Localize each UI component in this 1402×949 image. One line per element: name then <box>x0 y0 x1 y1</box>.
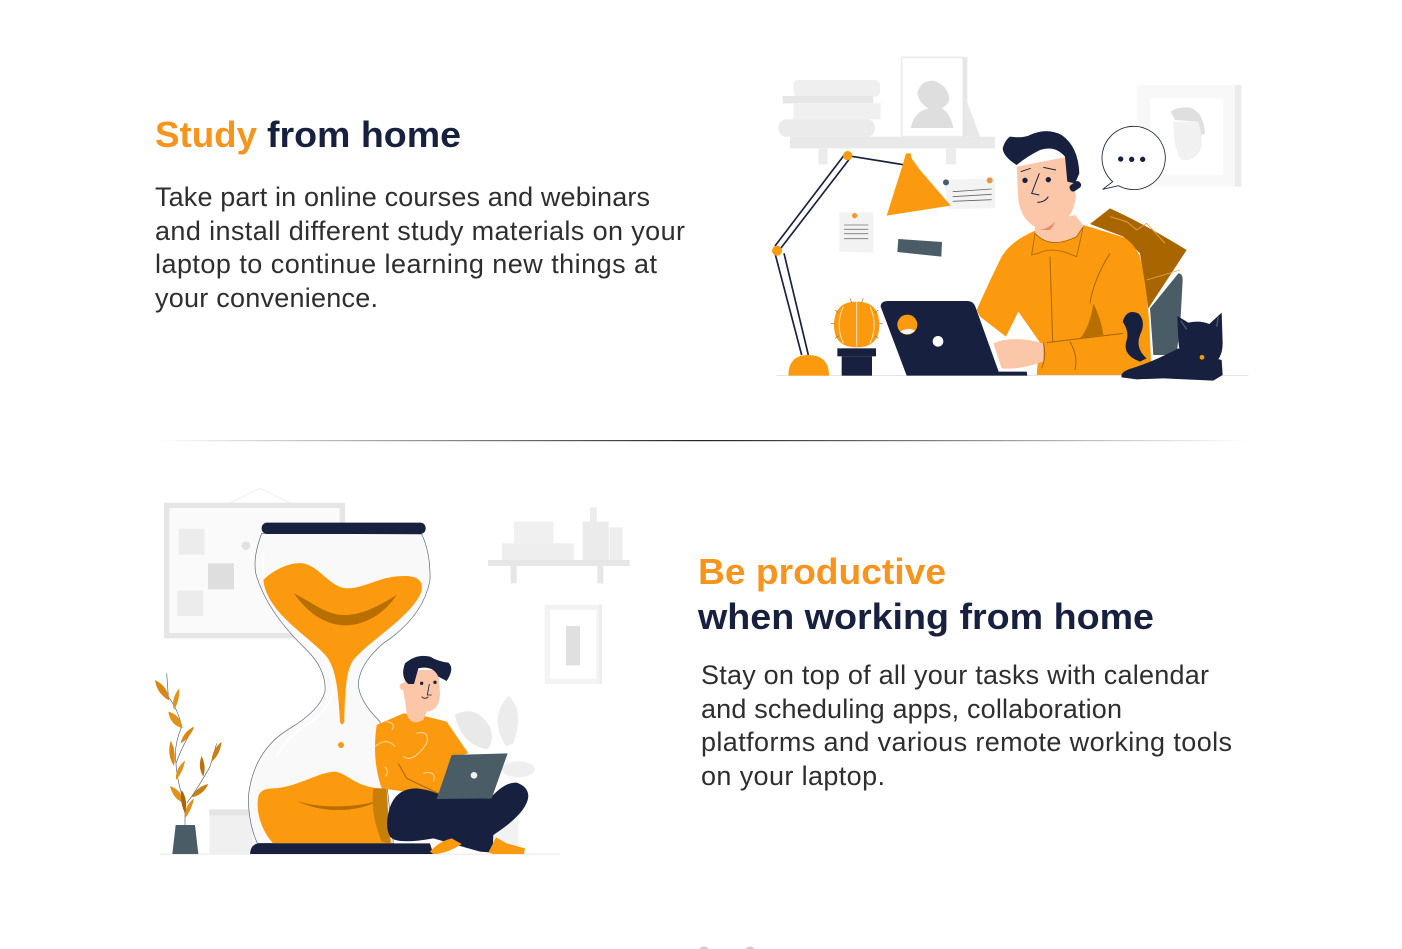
heading: Be productive when working from home: when working from home <box>697 596 1154 637</box>
text block: study description: your convenience. <box>155 283 378 313</box>
laptop <box>881 301 1027 376</box>
text block: productivity description <box>701 660 1232 791</box>
text block: study description: and install different study materials on your <box>155 216 685 246</box>
cactus in pot <box>831 298 883 376</box>
heading: Study from home <box>155 114 461 155</box>
wall picture <box>547 605 602 684</box>
hourglass <box>248 523 433 854</box>
text block: productivity description: platforms and various remote working tools <box>701 727 1232 757</box>
man in orange shirt <box>977 131 1152 375</box>
notice board <box>167 488 342 636</box>
text block: productivity description: on your laptop. <box>701 761 885 791</box>
background leaves <box>455 696 535 777</box>
text block: study description: Take part in online courses and webinars <box>155 182 650 212</box>
grey laptop <box>437 753 508 799</box>
shelf with books and portrait <box>778 57 995 164</box>
heading: Be productive when working from home <box>697 551 1154 637</box>
next section top marks <box>699 946 755 949</box>
sitting man <box>375 656 528 854</box>
text block: productivity description: and scheduling apps, collaboration <box>701 694 1122 724</box>
divider <box>155 440 1250 441</box>
desk lamp <box>772 151 951 376</box>
shelf with boxes <box>488 507 630 583</box>
floor line <box>160 853 560 856</box>
text block: study description <box>155 182 685 313</box>
desk line <box>777 375 1248 376</box>
plant in pot <box>155 673 222 854</box>
wall portrait frame <box>1137 85 1241 187</box>
chair and blanket <box>1090 208 1187 355</box>
text block: productivity description: Stay on top of all your tasks with calendar <box>701 660 1209 690</box>
heading: Study from home: from home <box>267 114 461 155</box>
illustration: man studying at desk <box>772 57 1248 381</box>
text block: study description: laptop to continue learning new things at <box>155 249 657 279</box>
illustration: man with giant hourglass <box>155 488 630 855</box>
heading: Be productive when working from home: Be productive <box>698 551 946 592</box>
speech bubble <box>1102 126 1165 190</box>
black cat <box>1121 312 1223 381</box>
pinned notes <box>839 177 995 257</box>
boxes behind hourglass <box>209 809 518 853</box>
heading: Study from home: Study <box>155 114 257 155</box>
